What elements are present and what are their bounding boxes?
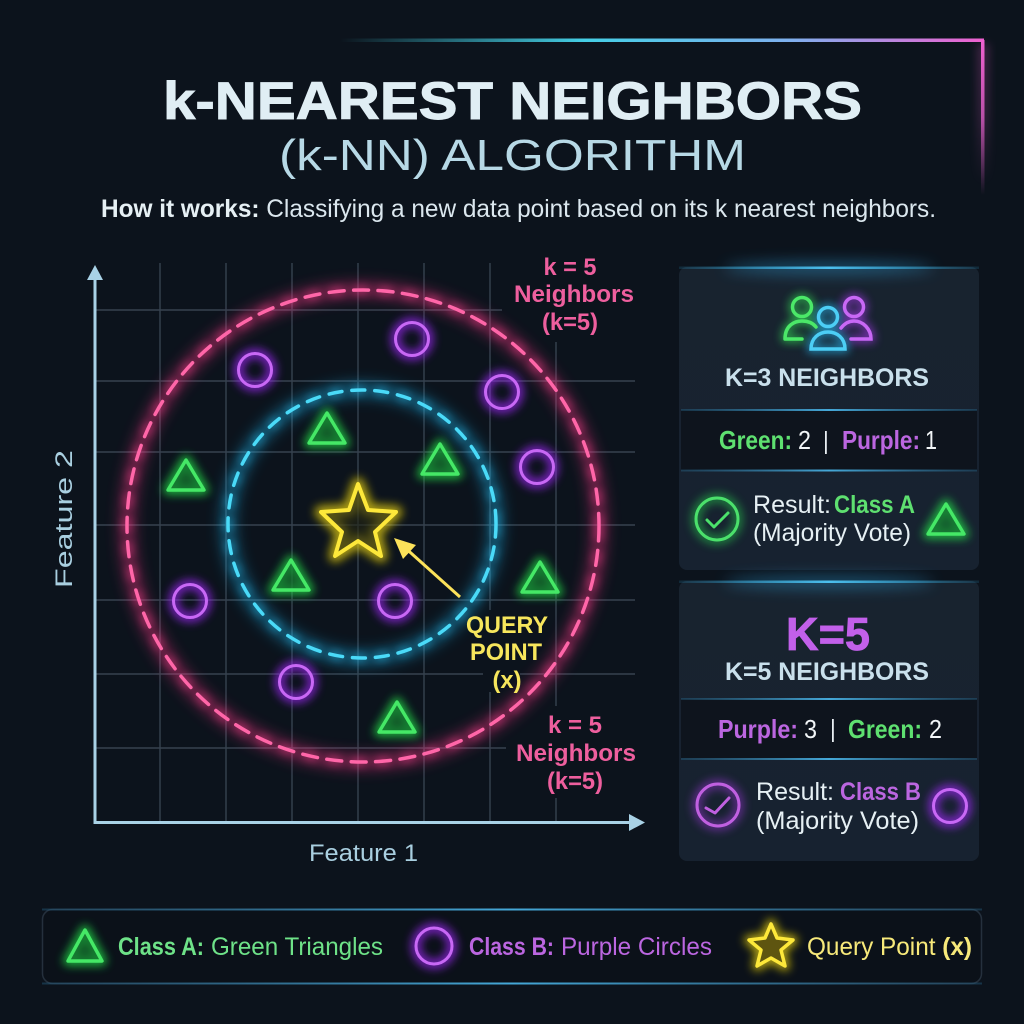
k=5 label top: k = 5 bbox=[544, 254, 596, 281]
panel top edge bbox=[679, 266, 979, 269]
icon: check bbox=[697, 784, 739, 826]
icon: triangle bbox=[928, 504, 964, 534]
k=5 label bottom bbox=[516, 712, 636, 795]
legend bbox=[42, 908, 982, 984]
panel heading: K=5 NEIGHBORS bbox=[725, 658, 929, 686]
title: (k-NN) ALGORITHM bbox=[279, 131, 746, 180]
grid lines bbox=[95, 263, 635, 822]
axis: feature 2 bbox=[87, 265, 103, 824]
legend: class B: Class B: bbox=[469, 933, 554, 961]
subtitle: How it works: Classifying a new data point based on its k nearest neighbors. bbox=[101, 195, 936, 223]
vote count row: 1 bbox=[925, 425, 937, 455]
result: class B: (Majority Vote) bbox=[756, 807, 919, 835]
vote count row bbox=[681, 698, 977, 760]
panel top glow bbox=[724, 261, 934, 275]
result: class B bbox=[697, 778, 966, 835]
result: class A: (Majority Vote) bbox=[753, 519, 911, 547]
axis: feature 1 bbox=[94, 814, 645, 831]
title bbox=[163, 72, 862, 180]
query star bbox=[321, 484, 396, 556]
class B points bbox=[174, 322, 554, 698]
panel: k=5 bbox=[679, 575, 979, 861]
vote count row: 2 bbox=[798, 425, 811, 455]
vote count row: Purple: bbox=[842, 425, 920, 455]
corner accent line bbox=[340, 38, 989, 195]
k=5 dashed ring bbox=[127, 290, 599, 762]
k=5 label top: Neighbors bbox=[514, 281, 634, 308]
panel top glow bbox=[724, 575, 934, 589]
big K=5: K=5 bbox=[786, 608, 870, 660]
vote count row: 3 bbox=[804, 714, 817, 744]
result: class B: Class B bbox=[840, 778, 921, 806]
result: class A: Result: bbox=[753, 491, 831, 519]
panel heading: K=3 NEIGHBORS bbox=[725, 364, 929, 392]
k=5 label bottom: Neighbors bbox=[516, 740, 636, 767]
query label: POINT bbox=[470, 639, 542, 666]
axis label: feature 2: Feature 2 bbox=[51, 450, 78, 588]
scatter chart bbox=[51, 254, 645, 867]
query label: QUERY bbox=[466, 612, 548, 639]
panel: k=3 bbox=[679, 261, 979, 570]
k=5 label bottom: (k=5) bbox=[547, 768, 603, 795]
legend: class A: Green Triangles bbox=[211, 933, 383, 961]
icon: check bbox=[696, 498, 738, 540]
query arrow bbox=[394, 538, 460, 597]
k=5 label bottom: k = 5 bbox=[548, 712, 602, 739]
result: class A bbox=[696, 491, 964, 547]
legend: class B: Purple Circles bbox=[561, 933, 712, 961]
title: k-NEAREST NEIGHBORS bbox=[163, 72, 862, 131]
result: class B: Result: bbox=[756, 778, 834, 806]
query label: (x) bbox=[492, 667, 522, 694]
legend: query point: Query Point (x) bbox=[807, 933, 972, 961]
axis label: feature 1: Feature 1 bbox=[309, 840, 418, 867]
vote count row: 2 bbox=[929, 714, 942, 744]
legend: class A bbox=[68, 930, 383, 961]
vote count row: Green: bbox=[719, 425, 792, 455]
icon: three people bbox=[785, 298, 871, 349]
vote count row: Purple: bbox=[718, 714, 798, 744]
k=5 label top bbox=[514, 254, 634, 336]
k=3 dashed ring bbox=[228, 390, 496, 658]
legend: class B bbox=[416, 928, 712, 964]
class A points bbox=[168, 413, 558, 732]
panel top edge bbox=[679, 580, 979, 583]
vote count row: Green: bbox=[848, 714, 922, 744]
k=5 label top: (k=5) bbox=[542, 309, 598, 336]
result: class A: Class A bbox=[834, 491, 915, 519]
vote count row bbox=[681, 409, 977, 472]
query label bbox=[466, 612, 548, 694]
legend: query point bbox=[749, 924, 972, 966]
legend: class A: Class A: bbox=[118, 933, 204, 961]
icon: circle bbox=[934, 790, 966, 822]
